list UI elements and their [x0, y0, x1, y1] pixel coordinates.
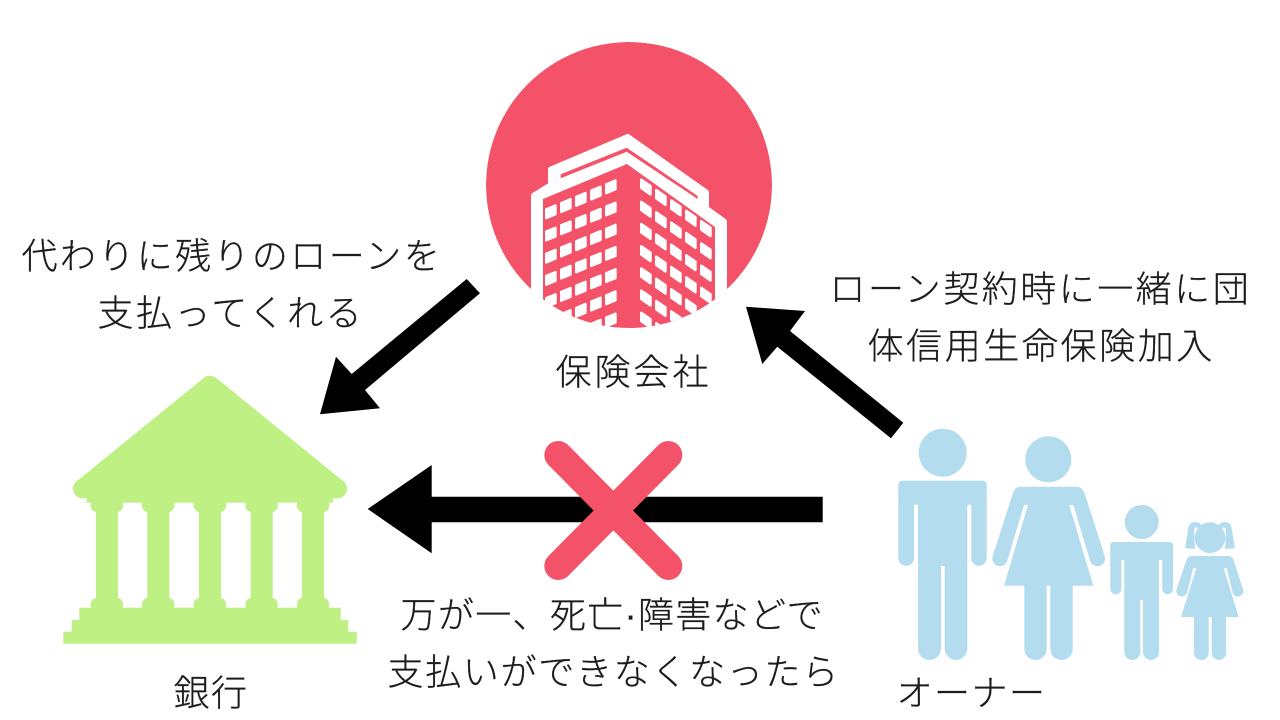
- arrow: owner to insurance company: [746, 307, 903, 438]
- icon: insurance company building in red circle: [486, 42, 772, 328]
- icon: daughter: [1176, 522, 1243, 660]
- icon: owner family: [898, 429, 1243, 660]
- icon: mother: [992, 436, 1105, 660]
- text: in case of death or disability: 万が一、死亡·障害などで: [400, 594, 824, 635]
- text: insurer pays the remaining loan: 代わりに残りのローンを: [22, 235, 442, 276]
- icon: bank: [63, 376, 357, 644]
- label: insurance company: 保険会社: [556, 351, 712, 392]
- icon: son: [1110, 505, 1173, 660]
- text: group credit life insurance at loan contract: [830, 268, 1251, 366]
- icon: father: [898, 429, 987, 660]
- text: insurer pays the remaining loan: [22, 235, 442, 333]
- text: group credit life insurance at loan contract: ローン契約時に一緒に団: [830, 268, 1251, 309]
- arrow: insurance company to bank: [320, 279, 480, 414]
- text: insurer pays the remaining loan: 支払ってくれる: [98, 292, 364, 333]
- text: group credit life insurance at loan contract: 体信用生命保険加入: [868, 325, 1215, 366]
- text: in case of death or disability: [388, 594, 840, 692]
- icon: red cross: [558, 455, 668, 566]
- label: owner: オーナー: [896, 672, 1047, 713]
- text: in case of death or disability: 支払いができなくなったら: [388, 651, 840, 692]
- arrow: owner to bank (blocked): [368, 465, 823, 553]
- label: bank: 銀行: [174, 672, 249, 713]
